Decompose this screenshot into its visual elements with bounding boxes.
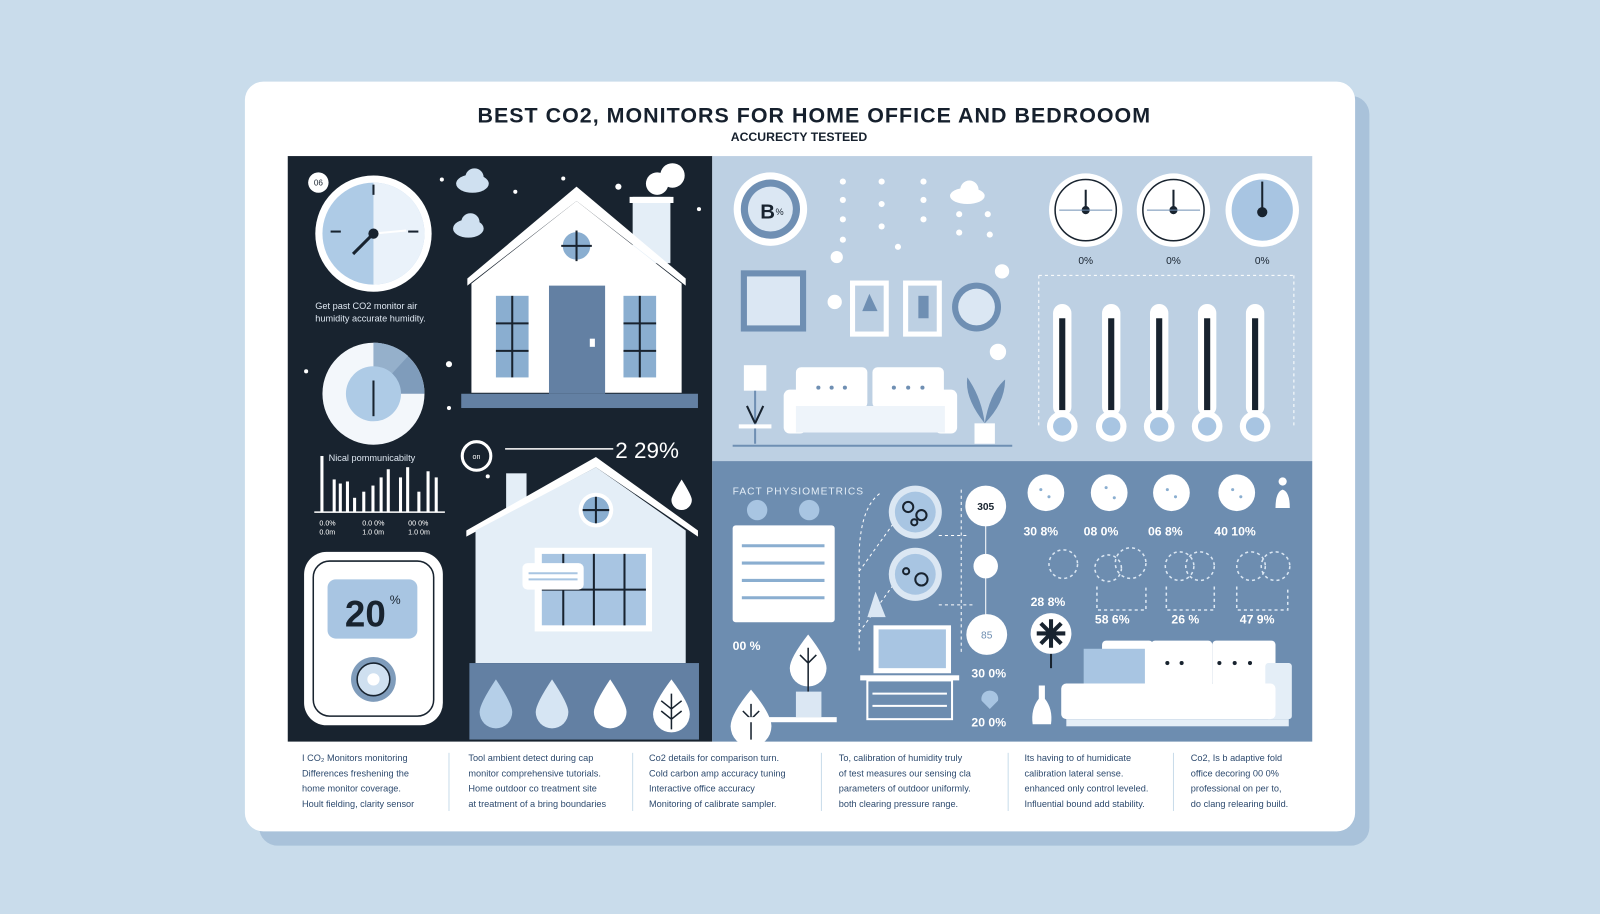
card shadow — [259, 96, 1369, 846]
panel: dark left — [288, 156, 712, 742]
sofa big — [1061, 641, 1292, 726]
monitor gauge icon — [734, 172, 807, 246]
badge: 06 — [314, 179, 323, 188]
doc card: 00 % — [733, 639, 761, 653]
sample dishes: 06 8% — [1148, 525, 1183, 539]
column 3: Interactive office accuracy — [649, 784, 755, 794]
wall frames — [741, 270, 1001, 337]
column 5: calibration lateral sense. — [1024, 768, 1123, 778]
value circles: 85 — [981, 631, 993, 642]
sofa — [784, 367, 957, 434]
column 5: Influential bound add stability. — [1024, 799, 1145, 809]
water drops — [480, 479, 692, 732]
bar chart: 0.0m — [319, 529, 335, 537]
molecule chart — [859, 486, 974, 653]
column 4: both clearing pressure range. — [839, 799, 958, 809]
caption text — [315, 301, 426, 323]
caption text: humidity accurate humidity. — [315, 313, 426, 323]
value circles: 20 0% — [971, 715, 1006, 729]
panel: bottom right stats — [712, 461, 1312, 747]
heading: FACT PHYSIOMETRICS — [733, 487, 864, 498]
monitor gauge icon: B — [760, 201, 775, 223]
column 4 — [839, 753, 972, 809]
percentage callout: on — [473, 453, 481, 461]
value circles: 305 — [977, 502, 995, 513]
column 2: at treatment of a bring boundaries — [468, 799, 606, 809]
caption text: Get past CO2 monitor air — [315, 301, 417, 311]
percentage callout — [462, 438, 679, 470]
trees — [731, 634, 837, 747]
clocks: 0% — [1255, 256, 1270, 267]
sample dishes: 40 10% — [1214, 525, 1256, 539]
dashed circles — [1049, 548, 1290, 610]
bar chart: 0.0 0% — [362, 519, 385, 527]
sample dishes: 30 8% — [1023, 525, 1058, 539]
clouds and stars — [304, 163, 701, 478]
gauge dial — [315, 175, 432, 292]
column 3: Cold carbon amp accuracy tuning — [649, 768, 786, 778]
column 5: enhanced only control leveled. — [1024, 784, 1148, 794]
house top — [461, 187, 698, 408]
column 1: Differences freshening the — [302, 768, 409, 778]
bar chart: 0.0% — [319, 519, 336, 527]
value circles: 30 0% — [971, 666, 1006, 680]
column 3 — [649, 753, 786, 809]
value circles — [965, 486, 1007, 729]
bar chart: 00 0% — [408, 519, 429, 527]
thermometers — [1039, 275, 1294, 442]
column 1: I CO₂ Monitors monitoring — [302, 753, 408, 763]
panel: bottom right stats: 26 % — [1171, 612, 1199, 626]
lamp — [739, 365, 771, 444]
house bottom — [466, 457, 699, 740]
badge — [308, 172, 329, 193]
column 1: home monitor coverage. — [302, 784, 401, 794]
bar chart: 1.0 0m — [408, 529, 430, 537]
column 4: of test measures our sensing cla — [839, 768, 972, 778]
column 6: professional on per to, — [1191, 784, 1282, 794]
title: BEST CO2, MONITORS FOR HOME OFFICE AND BEDROOOM — [477, 103, 1151, 127]
panel: top right living room — [712, 156, 1312, 461]
column 2: Tool ambient detect during cap — [468, 753, 593, 763]
plant — [967, 377, 1005, 444]
panel: bottom right stats: 47 9% — [1240, 612, 1275, 626]
thermostat device: 20 — [345, 593, 386, 634]
column 1: Hoult fielding, clarity sensor — [302, 799, 414, 809]
panel: bottom right stats: 28 8% — [1031, 595, 1065, 609]
column 3: Monitoring of calibrate sampler. — [649, 799, 776, 809]
column 4: To, calibration of humidity truly — [839, 753, 963, 763]
sample dishes: 08 0% — [1084, 525, 1118, 539]
column 1 — [302, 753, 414, 809]
column 5 — [1024, 753, 1148, 809]
vase — [1032, 686, 1051, 724]
clocks: 0% — [1166, 256, 1181, 267]
percentage callout: 2 29% — [615, 438, 679, 463]
column 2: Home outdoor co treatment site — [468, 784, 597, 794]
donut chart — [322, 343, 424, 445]
column 6: Co2, Is b adaptive fold — [1191, 753, 1282, 763]
sample dishes — [1023, 474, 1290, 539]
monitor gauge icon: % — [776, 207, 784, 217]
column 2: monitor comprehensive tutorials. — [468, 768, 601, 778]
clocks — [1049, 173, 1299, 267]
bar chart — [314, 453, 445, 537]
subtitle: ACCURECTY TESTEED — [731, 130, 867, 144]
column 2 — [468, 753, 606, 809]
text columns — [302, 753, 1288, 809]
clocks: 0% — [1078, 256, 1093, 267]
panel: bottom right stats: 58 6% — [1095, 612, 1130, 626]
bar chart: Nical pommunicabilty — [329, 453, 416, 463]
tv unit — [860, 625, 959, 719]
thermostat device — [304, 552, 443, 725]
card — [245, 82, 1355, 831]
fan icon — [1031, 613, 1071, 668]
column 4: parameters of outdoor uniformly. — [839, 784, 971, 794]
column 5: Its having to of humidicate — [1024, 753, 1131, 763]
thermostat device: % — [390, 593, 401, 607]
column 6: do clang relearing build. — [1191, 799, 1288, 809]
doc card — [733, 500, 835, 653]
column 6 — [1191, 753, 1288, 809]
particle dots — [828, 179, 1009, 360]
bar chart: 1.0 0m — [362, 529, 384, 537]
column 3: Co2 details for comparison turn. — [649, 753, 779, 763]
column 6: office decoring 00 0% — [1191, 768, 1279, 778]
